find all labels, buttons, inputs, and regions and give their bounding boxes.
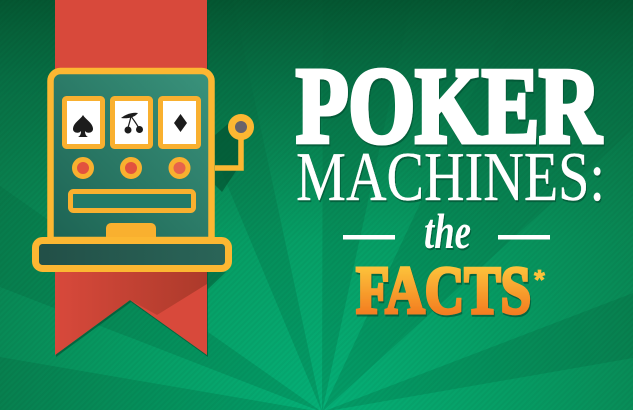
buttons xyxy=(74,160,188,176)
title: the, with rules xyxy=(343,203,550,259)
reel: cherries xyxy=(112,98,150,146)
lever shadow xyxy=(215,124,238,192)
slot machine xyxy=(36,71,250,268)
title xyxy=(296,47,605,328)
asterisk: * xyxy=(534,264,545,295)
coin slot xyxy=(70,192,194,210)
title: facts: FACTS xyxy=(356,252,531,328)
payout tray xyxy=(106,223,156,242)
reel: diamond xyxy=(160,98,198,146)
base shadow xyxy=(207,272,226,290)
base xyxy=(36,240,228,268)
top shading xyxy=(0,0,633,240)
title: the, with rules: the xyxy=(424,203,471,259)
machine body xyxy=(50,71,212,240)
ribbon xyxy=(55,0,207,355)
lever xyxy=(215,118,250,168)
reel: spade xyxy=(64,98,102,146)
